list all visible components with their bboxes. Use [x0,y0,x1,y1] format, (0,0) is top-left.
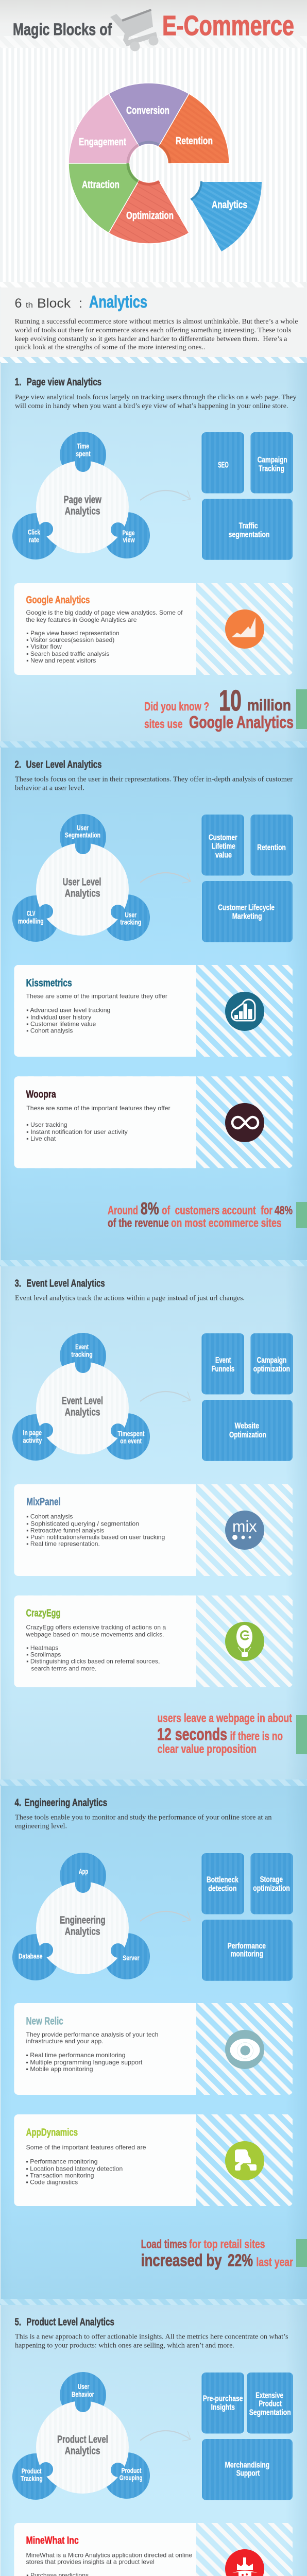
diagram: user level circles [12,814,150,942]
diagram: event level circles: on event [120,1437,142,1445]
diagram: user level circles: modelling [18,917,44,925]
diagram: engineering circles: Database [19,1952,43,1960]
feature blocks: Customer Lifecycle [218,904,275,912]
card: new relic: ▪ Mobile app monitoring [26,2065,93,2073]
heading: Product Level Analytics [26,2316,114,2328]
diagram: product level circles: Tracking [21,2475,43,2483]
description: These tools focus on the user in their representations. They offer in-depth analysis of customer [15,775,293,783]
feature blocks: value [215,851,232,860]
card: google analytics: the key features in Google Analytics are [26,616,137,623]
feature blocks: Extensive [255,2392,283,2400]
diagram: event level circles: Event [75,1343,89,1351]
callout: did you know [144,684,307,732]
card: google analytics: ▪ Search based traffic analysis [26,650,109,657]
callout: 8 percent of customers: of the revenue [108,1216,169,1230]
card: appdynamics: ▪ Performance monitoring [26,2158,98,2165]
segment: optimization: Optimization [126,210,174,222]
feature blocks: Funnels [211,1365,234,1374]
icon: mix logo [225,1511,264,1550]
diagram: event level circles: Timespent [117,1430,145,1438]
heading [14,1278,105,1290]
intro paragraph: quick look at the strengths of some of the more interesting ones.. [14,343,205,351]
diagram: engineering circles: Engineering [60,1915,106,1926]
description: will come in handy when you want a bird’s eye view of what’s happening in your online store. [15,402,288,410]
feature blocks: Bottleneck [207,1876,238,1885]
segment: attraction: Attraction [82,179,120,191]
title [13,9,294,52]
intro paragraph [14,317,298,351]
callout: 8 percent of customers: Around [108,1204,138,1217]
card: mixpanel: ▪ Real time representation. [26,1540,100,1548]
segment: retention [159,94,229,163]
diagram: event level circles: Analytics [65,1407,100,1418]
description [15,393,297,410]
description [15,775,293,792]
arrow [140,490,191,501]
card: woopra: These are some of the important features they offer [26,1105,170,1112]
card: woopra [14,1076,293,1168]
diagram: page view circles: Page [123,529,135,537]
heading: 6th block analytics: : [79,296,82,311]
card: woopra: ▪ User tracking [26,1121,67,1128]
feature blocks: Campaign [257,1356,286,1365]
card: kissmetrics: Kissmetrics [26,977,72,989]
feature blocks: Lifetime [212,842,235,851]
feature blocks: Marketing [232,912,262,921]
icon: eye [225,2030,264,2069]
card: mixpanel: ▪ Push notifications/emails based on user tracking [26,1534,165,1541]
card: new relic [14,2003,293,2095]
icon: growth chart [225,609,264,649]
diagram: user level circles: User [125,911,137,919]
diagram: event level circles: tracking [71,1350,93,1359]
heading: Event Level Analytics [26,1278,105,1290]
title: Magic Blocks of [13,20,112,39]
description: These tools enable you to monitor and study the performance of your online store at an [15,1814,272,1821]
card: appdynamics: ▪ Location based latency detection [26,2165,123,2172]
diagram: event level circles: activity [23,1436,42,1444]
diagram: product level circles: Product [122,2466,142,2475]
card: new relic: infrastructure and your app. [26,2038,104,2045]
card: woopra: ▪ Instant notification for user activity [26,1128,128,1136]
callout: 12 seconds: if there is no [230,1730,283,1743]
card: minewhat inc [14,2523,293,2576]
card: kissmetrics: ▪ Cohort analysis [26,1027,73,1035]
icon: shopping cart [110,9,159,52]
heading: 6th block analytics: Block [37,296,71,311]
arrow [140,1392,191,1402]
segment: engagement [69,94,139,163]
diagram: event level circles [12,1333,150,1461]
callout: 12 seconds: clear value proposition [158,1742,257,1756]
diagram: user level circles: User [77,824,89,832]
arrow [140,1911,191,1922]
callout: 8 percent of customers [108,1199,307,1230]
feature blocks: Tracking [259,464,284,473]
callout: load times: increased by [141,2250,222,2269]
icon: heart bars [225,992,264,1031]
diagram: product level circles: Product [22,2467,42,2475]
feature blocks [201,815,293,942]
card: new relic: New Relic [26,2015,63,2027]
segment: retention: Retention [176,135,213,147]
callout: 8 percent of customers: 48% [275,1204,293,1217]
feature blocks: detection [208,1885,236,1893]
heading: 6th block analytics: 6 [14,296,22,311]
callout: 12 seconds: 12 seconds [157,1725,227,1744]
diagram: product level circles: Grouping [120,2473,143,2482]
diagram: engineering circles: Analytics [65,1926,100,1938]
card: new relic: They provide performance analysis of your tech [26,2031,158,2038]
callout: 8 percent of customers: of customers account for [162,1204,272,1217]
heading: Engineering Analytics [25,1798,107,1809]
feature blocks: monitoring [231,1950,263,1959]
feature blocks: Optimization [229,1431,266,1439]
card: crazyegg: ▪ Scrollmaps [26,1651,61,1658]
diagram: engineering circles: App [79,1867,88,1875]
icon: appdynamics blob [225,2141,264,2180]
heading: 4. [14,1798,21,1809]
segment: conversion: Conversion [126,105,169,116]
description: This is a new approach to offer actionable insights. All the metrics here concentrate on what’s [15,2333,288,2341]
icon: mix logo: mix [232,1517,257,1535]
intro paragraph: Running a successful ecommerce store without metrics is almost unthinkable. But there’s a whole [14,317,298,325]
feature blocks: Support [236,2469,260,2478]
card: crazyegg: CrazyEgg [26,1607,60,1619]
card: appdynamics [14,2114,293,2206]
heading: 5. [14,2316,21,2328]
card: appdynamics: ▪ Code diagnostics [26,2178,78,2185]
callout: load times: Load times [141,2238,187,2251]
heading [14,759,102,771]
description: Event level analytics track the actions within a page instead of just url changes. [15,1294,245,1302]
description: happening to your products: which ones are selling, which aren’t and more. [15,2342,234,2349]
feature blocks: Retention [257,843,286,852]
card: google analytics: ▪ Visitor flow [26,643,62,650]
callout: did you know: 10 [219,684,242,717]
icon: balloon [225,1622,264,1661]
feature blocks: Event [215,1356,231,1365]
heading: Page view Analytics [27,377,101,388]
card: appdynamics: ▪ Transaction monitoring [26,2172,94,2179]
segment: attraction [69,163,139,233]
card: kissmetrics: ▪ Customer lifetime value [26,1021,96,1028]
diagram: page view circles: Time [77,442,89,450]
card: google analytics [14,583,293,675]
feature blocks: Customer [209,834,237,842]
heading: 6th block analytics [14,292,147,311]
feature blocks: optimization [253,1884,290,1893]
card: crazyegg: search terms and more. [31,1665,96,1672]
segment: optimization [109,180,189,244]
intro paragraph: keep evolving constantly so it gets harder and harder to differentiate between them. Here’s a [14,335,287,343]
card: minewhat inc: stores that provides insights at a product level [26,2558,155,2566]
panel: 4 engineering analytics [12,1798,307,2269]
feature blocks [201,432,293,560]
description: behavior at a user level. [15,784,84,792]
card: new relic: ▪ Multiple programming language support [26,2059,143,2066]
card: crazyegg: ▪ Distinguishing clicks based on referral sources, [26,1658,160,1665]
feature blocks: Storage [260,1875,283,1884]
diagram: user level circles: Segmentation [65,831,100,839]
callout: load times: last year [256,2255,293,2268]
diagram: user level circles: CLV [27,909,36,918]
arrow [140,873,191,883]
diagram: event level circles: In page [23,1429,42,1437]
heading: 6th block analytics: Analytics [89,292,147,311]
diagram: product level circles: Analytics [65,2446,100,2457]
callout: 8 percent of customers: 8% [141,1199,159,1218]
card: kissmetrics: ▪ Advanced user level tracking [26,1007,110,1014]
callout: load times: 22% [228,2250,253,2269]
segment: analytics, pulled out: Analytics [212,199,247,211]
card: crazyegg: CrazyEgg offers extensive tracking of actions on a [26,1624,166,1631]
feature blocks: Traffic [239,522,258,531]
card: google analytics: ▪ Page view based representation [26,630,120,637]
description [15,2333,288,2349]
feature blocks: Campaign [258,455,287,464]
diagram: user level circles: Analytics [65,888,100,900]
card: mixpanel: ▪ Retroactive funnel analysis [26,1527,104,1534]
card: minewhat inc: MineWhat Inc [26,2535,79,2546]
chart: six block wheel [69,83,262,251]
card: woopra: Woopra [26,1089,56,1100]
feature blocks [201,1853,293,1981]
callout: did you know: sites use [144,717,182,731]
panel: 2 user level analytics [12,759,307,1230]
diagram: page view circles: rate [29,536,39,544]
callout: 12 seconds [157,1711,307,1756]
card: appdynamics: AppDynamics [26,2127,78,2139]
card: crazyegg [14,1596,293,1687]
callout: load times: for top retail sites [189,2238,265,2251]
segment: engagement: Engagement [79,137,126,148]
feature blocks: Segmentation [249,2409,291,2417]
card: google analytics: ▪ New and repeat visitors [26,657,96,664]
arrow [140,2431,191,2441]
feature blocks: Website [235,1422,259,1431]
diagram: user level circles: tracking [120,918,141,926]
description: Page view analytical tools focus largely on tracking users through the clicks on a web page. They [15,393,297,401]
card: google analytics: Google is the big daddy of page view analytics. Some of [26,609,183,616]
card: mixpanel: MixPanel [26,1497,61,1508]
description: engineering level. [15,1822,67,1830]
feature blocks: Performance [228,1942,266,1951]
card: google analytics: Google Analytics [26,595,90,606]
segment: analytics, pulled out [191,181,262,251]
card: new relic: ▪ Real time performance monitoring [26,2052,126,2059]
feature blocks: segmentation [229,531,270,539]
diagram: product level circles [12,2372,150,2500]
diagram: page view circles: spent [76,450,91,458]
feature blocks: SEO [218,461,229,469]
diagram: page view circles: view [123,536,135,544]
diagram: page view circles [12,432,150,560]
diagram: product level circles: Behavior [72,2390,94,2398]
callout: load times [141,2238,307,2269]
description [15,1814,272,1830]
feature blocks: optimization [253,1365,290,1374]
card: appdynamics: Some of the important features offered are [26,2144,146,2151]
heading: 3. [14,1278,21,1290]
card: mixpanel [14,1484,293,1576]
feature blocks [201,1333,293,1461]
heading: 6th block analytics: th [26,301,33,310]
heading: 2. [14,759,21,771]
card: woopra: ▪ Live chat [26,1135,56,1142]
diagram: engineering circles: Server [123,1954,140,1962]
diagram: engineering circles [12,1853,150,1980]
diagram: page view circles: Page view [64,495,101,506]
card: mixpanel: ▪ Cohort analysis [26,1513,73,1520]
card: google analytics: ▪ Visitor sources(session based) [26,636,114,643]
heading [14,377,101,388]
icon: minewhat logo [225,2549,264,2576]
feature blocks: Product [259,2400,282,2409]
card: crazyegg: webpage based on mouse movements and clicks. [25,1631,164,1638]
card: minewhat inc: MineWhat is a Micro Analytics application directed at online [26,2552,193,2559]
segment: conversion [109,83,189,147]
panel: 1 page view analytics [12,377,307,732]
icon: infinity [225,1103,264,1142]
panel: 5 product level analytics [12,2316,307,2576]
diagram: page view circles: Analytics [65,506,100,517]
feature blocks: Insights [211,2403,235,2412]
card: crazyegg: ▪ Heatmaps [26,1645,58,1652]
card: kissmetrics: These are some of the important feature they offer [26,993,167,1000]
heading [14,2316,114,2328]
diagram: user level circles: User Level [63,876,101,888]
feature blocks: Pre-purchase [203,2395,243,2403]
card: kissmetrics [14,965,293,1057]
diagram: product level circles: Product Level [57,2434,108,2446]
card: kissmetrics: ▪ Individual user history [26,1014,91,1021]
card: mixpanel: ▪ Sophisticated querying / segmentation [26,1520,139,1528]
diagram: product level circles: User [78,2382,90,2391]
intro paragraph: world of tools out there for ecommerce stores each offering something interesting. These tools [14,326,292,334]
feature blocks [201,2372,293,2500]
callout: did you know: million [247,696,291,714]
heading: User Level Analytics [26,759,102,771]
panel: 3 event level analytics [12,1278,307,1756]
diagram: page view circles: Click [28,528,40,536]
heading: 1. [14,377,22,388]
feature blocks: Merchandising [225,2461,269,2469]
diagram: event level circles: Event Level [62,1396,103,1407]
callout: did you know: Did you know ? [144,700,209,713]
